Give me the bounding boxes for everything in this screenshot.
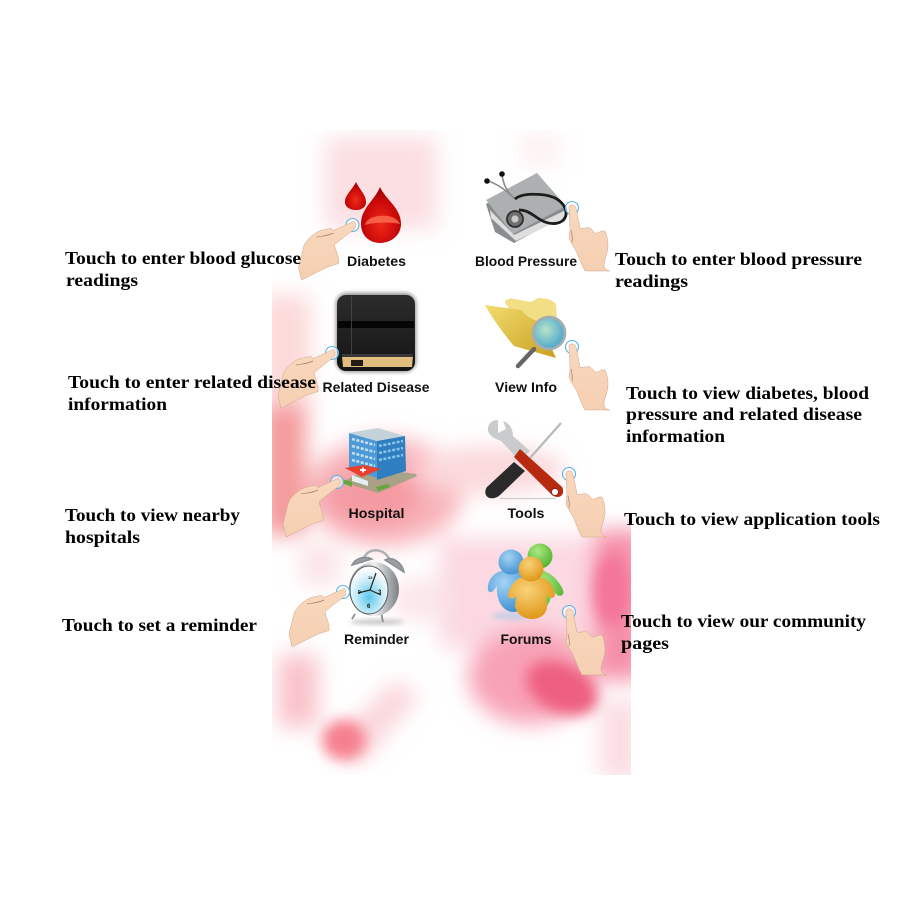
caption: blood pressure: Touch to enter blood pressure [615,249,862,269]
icon: forum people [488,544,563,620]
hand: view info [566,340,610,410]
caption: community: Touch to view our community [621,611,866,631]
caption: blood glucose: Touch to enter blood glucose [65,248,301,268]
label: Diabetes: Diabetes [347,253,406,269]
caption: related disease [68,372,316,414]
caption: reminder: Touch to set a reminder [62,615,257,635]
icon: stethoscope on folder [484,171,568,243]
caption: community: pages [621,633,669,653]
caption: related disease: Touch to enter related disease [68,372,316,392]
hand: forums [562,606,607,675]
icon: wrench and screwdriver [485,420,563,498]
caption: view info: information [626,426,725,446]
icon: alarm clock: 6 [367,604,371,610]
caption: related disease: information [68,394,167,414]
caption: blood glucose [65,248,301,290]
icon: folder with magnifier [485,298,565,366]
hand: reminder [289,586,350,647]
hand: diabetes [298,218,359,280]
caption: community [621,611,866,653]
caption: tools: Touch to view application tools [624,509,880,529]
caption: view info [626,383,869,446]
icon: alarm clock: 12 [368,575,373,580]
label: View Info: View Info [495,379,557,395]
label: Forums: Forums [500,631,552,647]
icon: hospital building [342,428,417,493]
icon: alarm clock: 9 [358,590,361,596]
caption: blood glucose: readings [66,270,138,290]
icon: alarm clock [349,550,404,625]
icon: blood drops [345,182,401,243]
icon: black book [336,293,416,372]
caption: hospitals: Touch to view nearby [65,505,240,525]
icon: alarm clock: 3 [378,590,382,596]
label: Tools: Tools [508,505,545,521]
hand: related disease [278,346,338,408]
caption: view info: Touch to view diabetes, blood [626,383,869,403]
label: Reminder: Reminder [344,631,410,647]
label: Related Disease: Related Disease [322,379,430,395]
label: Hospital: Hospital [348,505,404,521]
label: Blood Pressure: Blood Pressure [475,253,577,269]
hand: hospital [283,476,344,537]
hand: blood pressure [566,202,610,271]
caption: blood pressure [615,249,862,291]
caption: hospitals [65,505,240,547]
hand: tools [562,468,607,537]
caption: view info: pressure and related disease [626,404,862,424]
background: blurred pink floral panel [262,130,644,780]
caption: hospitals: hospitals [65,527,140,547]
caption: blood pressure: readings [615,271,688,291]
